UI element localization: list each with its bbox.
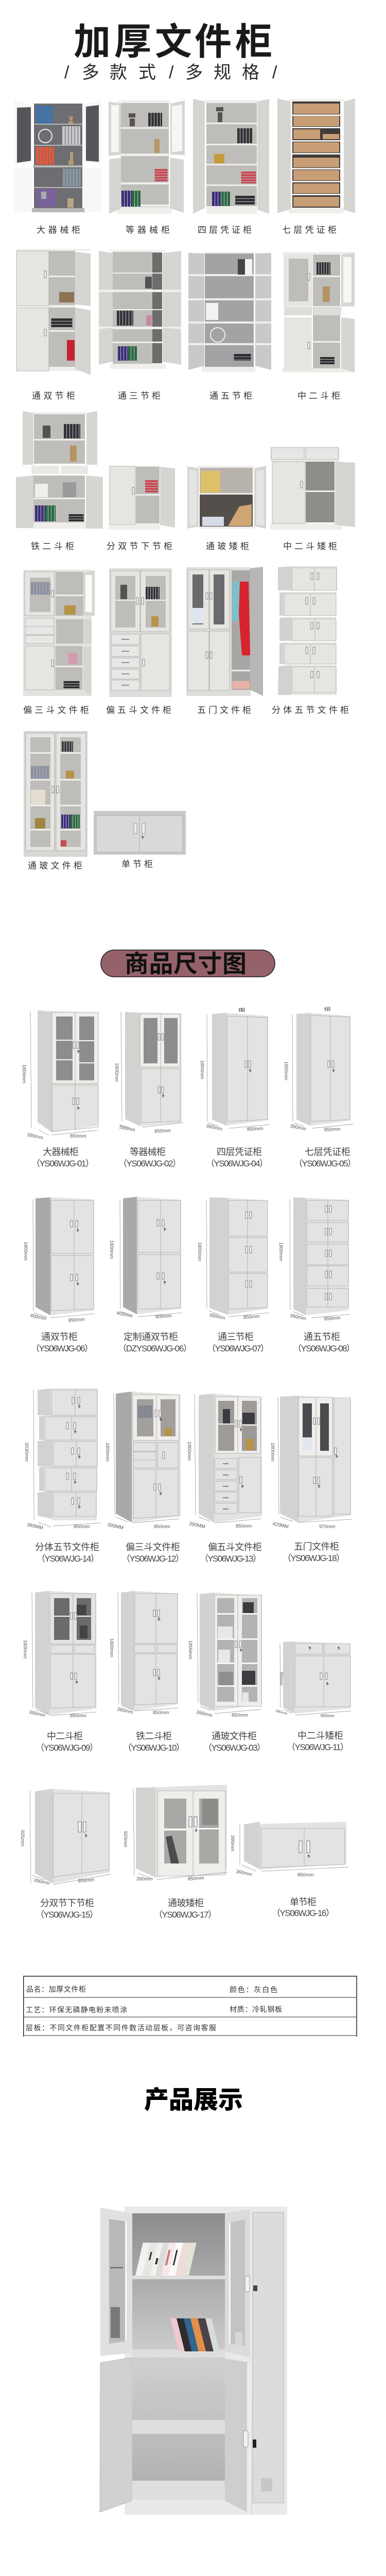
dimension cabinet: 通玻矮柜 YS06WJG-17: 920mm bbox=[122, 1831, 128, 1848]
dimension cabinet: 大器械柜 YS06WJG-01: 850mm bbox=[70, 1133, 86, 1139]
dimension cabinet: 通三节柜 YS06WJG-07: 850mm bbox=[243, 1314, 260, 1320]
label: 五门文件柜 bbox=[294, 1541, 339, 1552]
model: （YS06WJG-07） bbox=[207, 1344, 269, 1353]
dimension cabinet: 通双节柜 YS06WJG-06: 400mm bbox=[29, 1313, 47, 1322]
label: 通三节柜 bbox=[118, 391, 161, 401]
dimension cabinet: 七层凭证柜 YS06WJG-05: 1800mm bbox=[283, 1061, 289, 1080]
spec: 工艺: 工艺：环保无磷静电粉末喷涂 bbox=[26, 2006, 127, 2014]
model: （DZYS06WJG-06） bbox=[118, 1344, 192, 1353]
dimension cabinet: 大器械柜 YS06WJG-01: 1800mm bbox=[21, 1064, 27, 1083]
label: 通五节柜 bbox=[304, 1332, 340, 1342]
dimension cabinet: 七层凭证柜 YS06WJG-05: （七层） bbox=[322, 1007, 333, 1011]
dimension cabinet: 通玻矮柜 YS06WJG-17: 850mm bbox=[187, 1875, 204, 1882]
cabinet: 通玻文件柜 bbox=[24, 731, 87, 857]
dimension cabinet: 通玻矮柜 YS06WJG-17: 390mm bbox=[136, 1876, 153, 1882]
cabinet: 偏五斗文件柜 bbox=[109, 568, 172, 697]
dimension cabinet: 中二斗矮柜 YS06WJG-11: 390mm bbox=[275, 1709, 288, 1716]
label: 四层凭证柜 bbox=[198, 225, 252, 235]
label: 大器械柜 bbox=[43, 1147, 79, 1157]
dimension cabinet: 铁二斗柜 YS06WJG-10: 850mm bbox=[153, 1710, 169, 1716]
label: 通双节柜 bbox=[32, 391, 75, 401]
dimension cabinet: 七层凭证柜 YS06WJG-05 bbox=[283, 1007, 353, 1133]
label: 通双节柜 bbox=[41, 1332, 78, 1342]
label: 分体五节文件柜 bbox=[35, 1542, 99, 1552]
label: 单节柜 bbox=[290, 1897, 317, 1907]
model: （YS06WJG-08） bbox=[293, 1344, 355, 1353]
model: （YS06WJG-15） bbox=[36, 1910, 98, 1920]
dimension cabinet: 大器械柜 YS06WJG-01: 390mm bbox=[26, 1132, 44, 1141]
dimension cabinet: 中二斗矮柜 YS06WJG-11: 850mm bbox=[321, 1714, 335, 1718]
model: （YS06WJG-12） bbox=[121, 1554, 184, 1564]
dimension cabinet: 大器械柜 YS06WJG-01 bbox=[21, 1010, 98, 1141]
door: lower left bbox=[100, 2358, 132, 2512]
dimension cabinet: 中二斗矮柜 YS06WJG-11: 950mm bbox=[279, 1672, 284, 1686]
door: upper right glass bbox=[225, 2209, 257, 2358]
dimension cabinet: 通双节柜 YS06WJG-06: 1800mm bbox=[23, 1242, 28, 1261]
dimension cabinet: 偏三斗文件柜 YS06WJG-12 bbox=[104, 1392, 181, 1531]
cabinet: 等器械柜 bbox=[109, 100, 185, 214]
model: （YS06WJG-01） bbox=[31, 1159, 94, 1168]
label: 单节柜 bbox=[121, 859, 153, 869]
dimension cabinet: 单节柜 YS06WJG-16: 850mm bbox=[297, 1872, 314, 1878]
label: 定制通双节柜 bbox=[124, 1332, 178, 1342]
dimension cabinet: 铁二斗柜 YS06WJG-10 bbox=[109, 1591, 179, 1716]
label: 中二斗柜 bbox=[297, 391, 340, 401]
model: （YS06WJG-06） bbox=[31, 1344, 93, 1353]
label: 分体五节文件柜 bbox=[272, 705, 349, 715]
dimension cabinet: 等器械柜 YS06WJG-02: 1800mm bbox=[114, 1063, 119, 1082]
dimension cabinet: 通三节柜 YS06WJG-07: 390mm bbox=[208, 1312, 226, 1321]
model: （YS06WJG-02） bbox=[118, 1159, 181, 1168]
dimension cabinet: 偏三斗文件柜 YS06WJG-12: 1800mm bbox=[104, 1443, 110, 1462]
books: lower shelf bbox=[170, 2318, 220, 2351]
cabinet: 通五节柜 bbox=[188, 252, 271, 372]
label: 偏五斗文件柜 bbox=[208, 1542, 262, 1552]
dimension cabinet: 分体五节文件柜 YS06WJG-14 bbox=[24, 1388, 101, 1531]
dimension cabinet: 等器械柜 YS06WJG-02 bbox=[114, 1011, 183, 1134]
cabinet: 铁二斗柜 bbox=[16, 411, 103, 529]
model: （YS06WJG-16） bbox=[272, 1908, 335, 1918]
spec: 颜色: 颜色：灰白色 bbox=[230, 1986, 277, 1994]
dimension cabinet: 分体五节文件柜 YS06WJG-14: 360MM bbox=[26, 1522, 44, 1531]
title: 加厚文件柜 bbox=[74, 22, 272, 63]
dimension cabinet: 偏五斗文件柜 YS06WJG-13: 390MM bbox=[188, 1521, 206, 1530]
dimension cabinet: 偏五斗文件柜 YS06WJG-13 bbox=[186, 1394, 262, 1530]
dimension cabinet: 单节柜 YS06WJG-16 bbox=[230, 1822, 348, 1878]
dimension cabinet: 等器械柜 YS06WJG-02: 390mm bbox=[118, 1124, 136, 1133]
product photo: open cabinet bbox=[100, 2207, 287, 2515]
label: 通玻文件柜 bbox=[28, 861, 82, 871]
dimension cabinet: 通玻文件柜 YS06WJG-03: 1800mm bbox=[187, 1640, 193, 1659]
dimension cabinet: 通五节柜 YS06WJG-08: 1800mm bbox=[278, 1242, 284, 1261]
label: 分双节下节柜 bbox=[40, 1898, 94, 1908]
label: 中二斗柜 bbox=[47, 1731, 83, 1741]
dimension cabinet: 五门文件柜 YS06WJG-18 bbox=[270, 1396, 352, 1530]
label: 中二斗矮柜 bbox=[297, 1731, 343, 1741]
dimension cabinet: 中二斗矮柜 YS06WJG-11 bbox=[275, 1641, 351, 1718]
dimension cabinet: 单节柜 YS06WJG-16: 360mm bbox=[235, 1869, 253, 1878]
dimension cabinet: 五门文件柜 YS06WJG-18: 420MM bbox=[272, 1521, 289, 1530]
label: 分双节下节柜 bbox=[107, 541, 172, 551]
dimension cabinet: 中二斗柜 YS06WJG-09: 1800mm bbox=[22, 1640, 28, 1659]
dimension cabinet: 四层凭证柜 YS06WJG-04: （四层） bbox=[236, 1008, 248, 1012]
cabinet: 中二斗矮柜 bbox=[270, 447, 355, 530]
subtitle: /多款式/多规格/ bbox=[64, 63, 277, 82]
dimension cabinet: 七层凭证柜 YS06WJG-05: 850mm bbox=[324, 1126, 341, 1133]
label: 中二斗矮柜 bbox=[283, 541, 337, 551]
model: （YS06WJG-18） bbox=[283, 1553, 345, 1563]
dimension cabinet: 中二斗柜 YS06WJG-09: 850mm bbox=[70, 1713, 86, 1719]
spec table bbox=[24, 1976, 357, 2037]
dimension cabinet: 四层凭证柜 YS06WJG-04: 850mm bbox=[247, 1126, 264, 1132]
label: 通五节柜 bbox=[209, 391, 252, 401]
spec: 材质: 材质：冷轧钢板 bbox=[230, 2005, 282, 2013]
label: 偏三斗文件柜 bbox=[23, 705, 89, 715]
label: 通玻文件柜 bbox=[212, 1731, 257, 1741]
dimension cabinet: 分体五节文件柜 YS06WJG-14: 2030mm bbox=[24, 1443, 29, 1462]
dimension cabinet: 偏五斗文件柜 YS06WJG-13: 850mm bbox=[236, 1523, 252, 1529]
cabinet: 四层凭证柜 bbox=[193, 99, 269, 214]
dimension cabinet: 偏五斗文件柜 YS06WJG-13: 1800mm bbox=[186, 1442, 192, 1461]
dimension cabinet: 通五节柜 YS06WJG-08: 390mm bbox=[289, 1313, 307, 1322]
dimension cabinet: 分双节下节柜 YS06WJG-15: 850mm bbox=[78, 1877, 95, 1884]
dimension cabinet: 定制通双节柜 DZYS06WJG-06: 400mm bbox=[116, 1310, 133, 1319]
label: 等器械柜 bbox=[130, 1147, 166, 1157]
cabinet: 大器械柜 bbox=[14, 100, 101, 213]
dimension cabinet: 通三节柜 YS06WJG-07 bbox=[197, 1197, 269, 1321]
dimension cabinet: 通玻文件柜 YS06WJG-03: 850mm bbox=[232, 1713, 248, 1718]
model: （YS06WJG-11） bbox=[287, 1742, 349, 1752]
label: 大器械柜 bbox=[37, 225, 80, 235]
cabinet: 单节柜 bbox=[94, 811, 186, 855]
label: 通三节柜 bbox=[218, 1332, 254, 1342]
label: 等器械柜 bbox=[126, 225, 170, 235]
cabinet: 分体五节文件柜 bbox=[278, 566, 337, 695]
label: 偏三斗文件柜 bbox=[126, 1542, 180, 1552]
dimension cabinet: 通玻矮柜 YS06WJG-17 bbox=[122, 1785, 227, 1882]
dimension cabinet: 七层凭证柜 YS06WJG-05: 390mm bbox=[289, 1123, 307, 1132]
model: （YS06WJG-04） bbox=[206, 1159, 268, 1168]
dimension cabinet: 通玻文件柜 YS06WJG-03: 390mm bbox=[196, 1709, 213, 1719]
dimension cabinet: 通三节柜 YS06WJG-07: 1800mm bbox=[197, 1242, 202, 1261]
dimension cabinet: 四层凭证柜 YS06WJG-04: 1800mm bbox=[199, 1060, 205, 1079]
dimension cabinet: 通双节柜 YS06WJG-06: 850mm bbox=[68, 1317, 85, 1324]
model: （YS06WJG-17） bbox=[154, 1910, 217, 1920]
cabinet: 分双节下节柜 bbox=[109, 466, 175, 530]
cabinet: 通玻矮柜 bbox=[187, 466, 266, 529]
cabinet: 通双节柜 bbox=[16, 249, 91, 375]
dimension cabinet: 偏三斗文件柜 YS06WJG-12: 390MM bbox=[107, 1522, 124, 1531]
dimension cabinet: 铁二斗柜 YS06WJG-10: 390mm bbox=[116, 1706, 134, 1716]
cabinet: 五门文件柜 bbox=[186, 567, 263, 696]
dimension cabinet: 四层凭证柜 YS06WJG-04: 390mm bbox=[205, 1123, 223, 1132]
model: （YS06WJG-10） bbox=[123, 1743, 185, 1753]
dimension cabinet: 定制通双节柜 DZYS06WJG-06 bbox=[109, 1197, 182, 1320]
spec: 层板: 层板：不同文件柜配置不同件数活动层板，可咨询客服 bbox=[26, 2024, 216, 2032]
dimension cabinet: 分双节下节柜 YS06WJG-15 bbox=[20, 1789, 111, 1887]
label: 五门文件柜 bbox=[197, 705, 251, 715]
dimension cabinet: 通五节柜 YS06WJG-08 bbox=[278, 1197, 350, 1322]
section: product overview bbox=[14, 22, 355, 871]
heading: 产品展示: 产品展示 bbox=[144, 2087, 243, 2114]
model: （YS06WJG-09） bbox=[36, 1743, 98, 1753]
label: 七层凭证柜 bbox=[282, 225, 337, 235]
dimension cabinet: 四层凭证柜 YS06WJG-04 bbox=[199, 1008, 269, 1132]
label: 铁二斗柜 bbox=[31, 541, 74, 551]
dimension cabinet: 铁二斗柜 YS06WJG-10: 1800mm bbox=[109, 1638, 114, 1657]
label: 偏五斗文件柜 bbox=[106, 705, 171, 715]
section: product dimensions bbox=[20, 950, 356, 1920]
dimension cabinet: 通双节柜 YS06WJG-06 bbox=[23, 1197, 95, 1324]
heading pill: 商品尺寸图 bbox=[125, 950, 247, 977]
spec: 品名: 品名：加厚文件柜 bbox=[26, 1985, 86, 1993]
cabinet: 通三节柜 bbox=[99, 250, 181, 369]
door: lower right bbox=[225, 2359, 272, 2515]
dimension cabinet: 定制通双节柜 DZYS06WJG-06: 1800mm bbox=[109, 1240, 114, 1259]
door: upper left glass bbox=[100, 2208, 132, 2356]
dimension cabinet: 中二斗柜 YS06WJG-09: 390mm bbox=[28, 1709, 46, 1719]
dimension cabinet: 单节柜 YS06WJG-16: 390mm bbox=[230, 1835, 235, 1852]
dimension cabinet: 五门文件柜 YS06WJG-18: 1800mm bbox=[270, 1443, 275, 1462]
dimension cabinet: 通玻文件柜 YS06WJG-03 bbox=[187, 1592, 262, 1719]
label: 四层凭证柜 bbox=[217, 1147, 262, 1157]
dimension cabinet: 通五节柜 YS06WJG-08: 850mm bbox=[324, 1315, 341, 1322]
model: （YS06WJG-05） bbox=[294, 1159, 356, 1168]
dimension cabinet: 偏三斗文件柜 YS06WJG-12: 850mm bbox=[154, 1524, 170, 1530]
label: 七层凭证柜 bbox=[305, 1147, 350, 1157]
dimension cabinet: 等器械柜 YS06WJG-02: 850mm bbox=[154, 1128, 171, 1134]
model: （YS06WJG-14） bbox=[37, 1554, 99, 1564]
dimension cabinet: 中二斗柜 YS06WJG-09 bbox=[22, 1591, 96, 1719]
cabinet: 偏三斗文件柜 bbox=[23, 570, 95, 696]
dimension cabinet: 分体五节文件柜 YS06WJG-14: 850mm bbox=[74, 1524, 90, 1530]
label: 铁二斗柜 bbox=[136, 1731, 172, 1741]
label: 通玻矮柜 bbox=[206, 541, 249, 551]
dimension cabinet: 分双节下节柜 YS06WJG-15: 925mm bbox=[20, 1830, 25, 1846]
cabinet: 中二斗柜 bbox=[282, 252, 355, 372]
label: 通玻矮柜 bbox=[168, 1898, 204, 1908]
dimension cabinet: 定制通双节柜 DZYS06WJG-06: 900mm bbox=[155, 1313, 172, 1320]
cabinet: 七层凭证柜 bbox=[277, 98, 355, 213]
model: （YS06WJG-03） bbox=[203, 1743, 266, 1753]
dimension cabinet: 分双节下节柜 YS06WJG-15: 390mm bbox=[33, 1877, 50, 1887]
model: （YS06WJG-13） bbox=[200, 1554, 261, 1564]
dimension cabinet: 五门文件柜 YS06WJG-18: 970mm bbox=[319, 1524, 336, 1530]
books: upper shelf bbox=[135, 2243, 197, 2276]
